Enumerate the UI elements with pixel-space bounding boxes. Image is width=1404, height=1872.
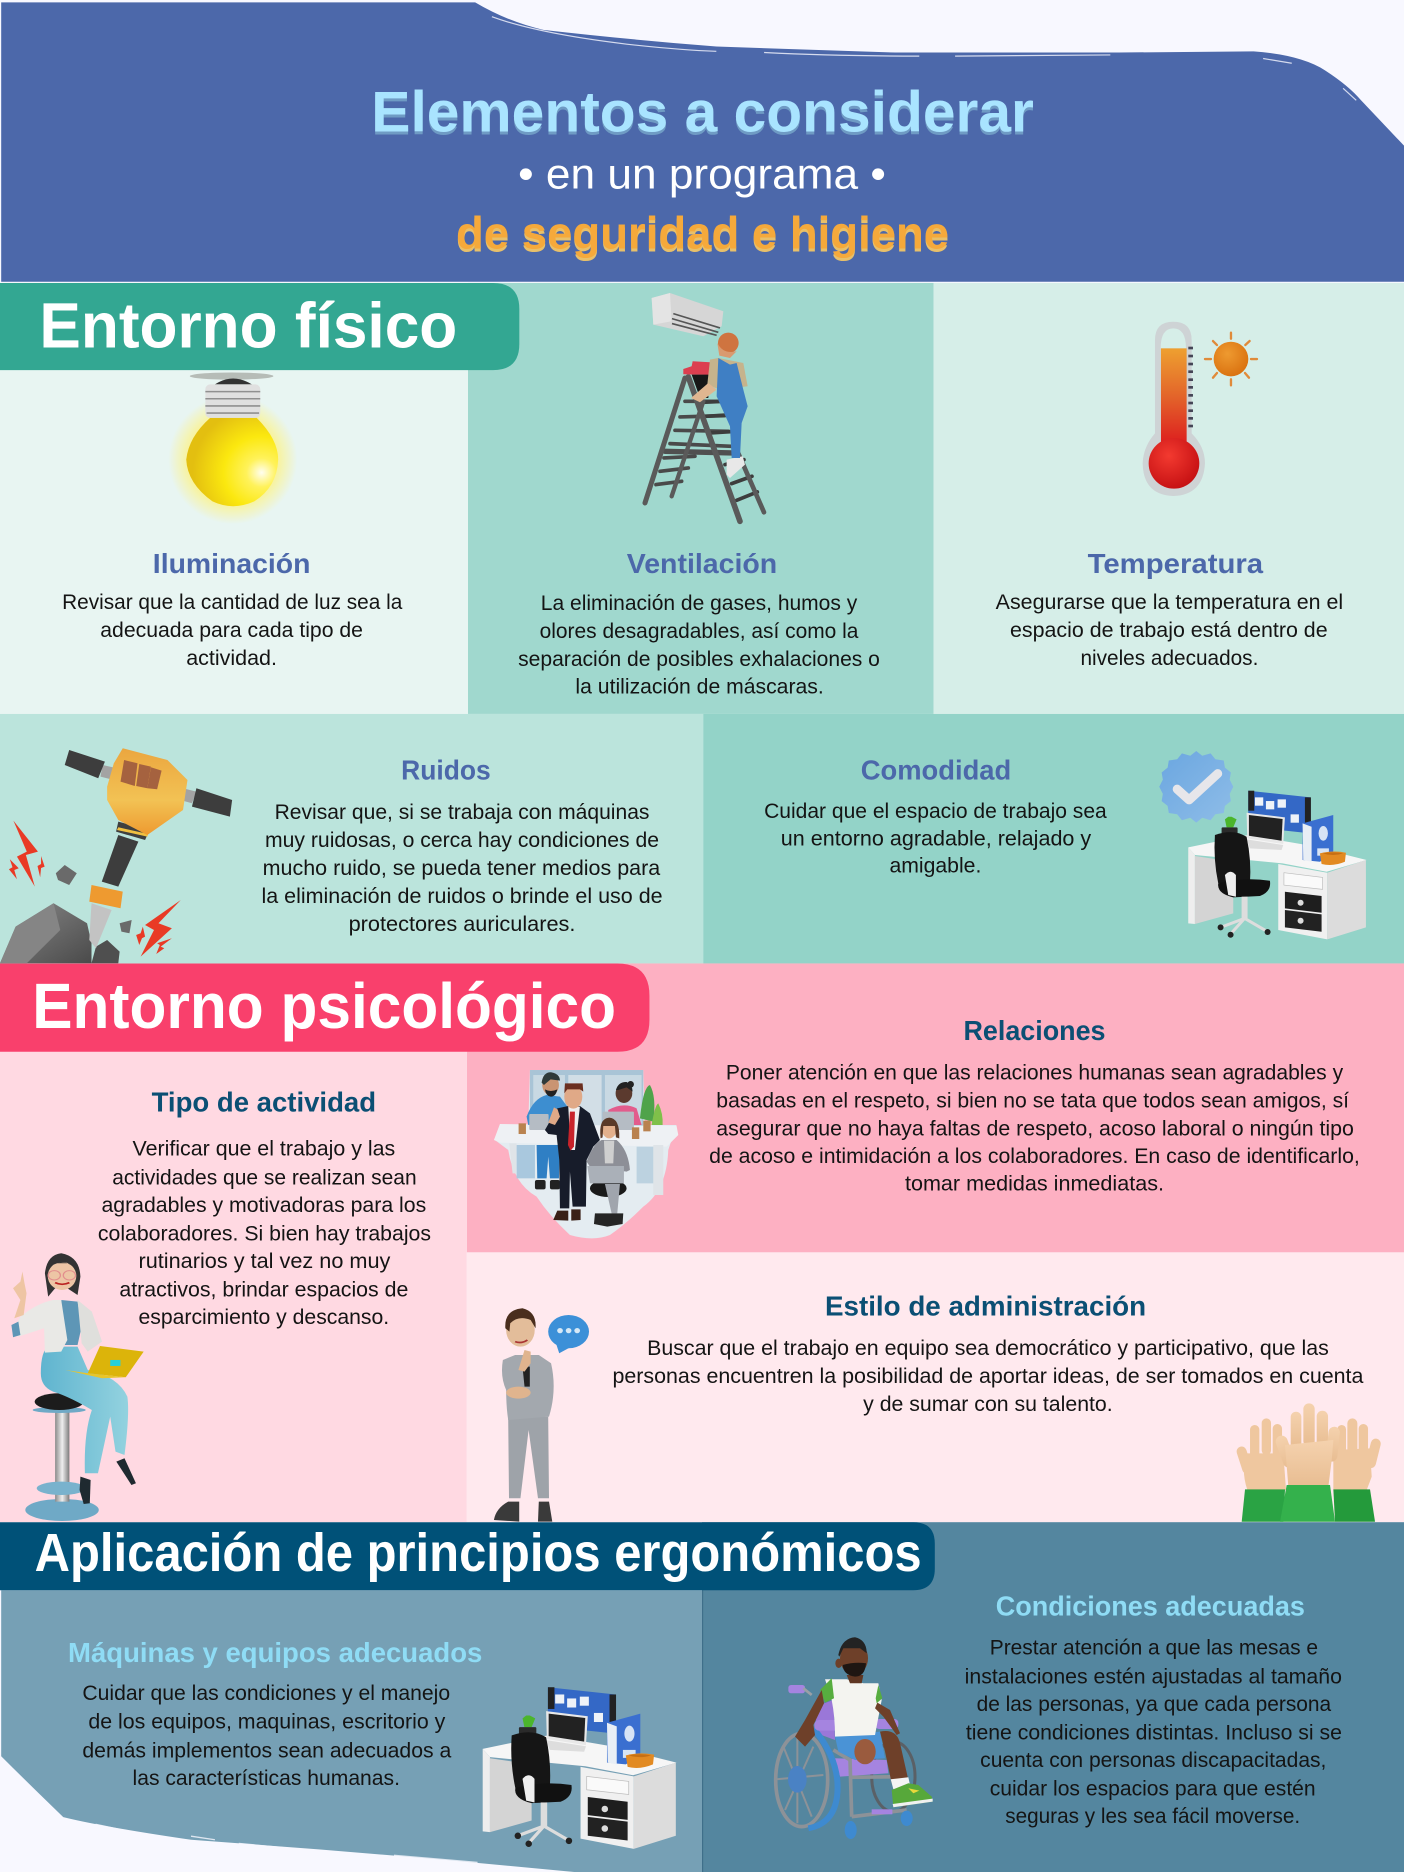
text: Tipo de actividad: actividades que se realizan sean — [112, 1166, 417, 1189]
heading bar: Entorno psicológico: Entorno psicológico — [32, 970, 616, 1042]
text: Condiciones adecuadas: cuenta con personas discapacitadas, — [980, 1749, 1326, 1772]
panel: header — [1, 2, 1404, 282]
panel: Relaciones — [467, 963, 1404, 1252]
text: Tipo de actividad — [98, 1138, 431, 1329]
icon: man in wheelchair — [776, 1637, 933, 1839]
text: Tipo de actividad: colaboradores. Si bien hay trabajos — [98, 1222, 431, 1245]
panel: Ventilación — [468, 283, 934, 714]
heading bar: Entorno físico: Entorno físico — [39, 289, 457, 361]
text: Ruidos: Revisar que, si se trabaja con máquinas — [275, 801, 649, 824]
icon: thinking man with speech bubble — [494, 1308, 589, 1522]
heading: Máquinas y equipos adecuados: Máquinas y equipos adecuados — [68, 1637, 482, 1668]
text: Comodidad: un entorno agradable, relajado y — [781, 827, 1092, 850]
text: Ventilación: olores desagradables, así como la — [540, 620, 859, 643]
text: Condiciones adecuadas — [965, 1637, 1342, 1828]
text: Tipo de actividad: Verificar que el trabajo y las — [133, 1138, 395, 1161]
panel: Ruidos — [0, 714, 703, 963]
text: Máquinas y equipos adecuados: las características humanas. — [133, 1767, 400, 1790]
text: Ruidos: muy ruidosas, o cerca hay condiciones de — [265, 829, 659, 852]
text: Comodidad: Cuidar que el espacio de trabajo sea — [764, 800, 1107, 823]
heading: Temperatura: Temperatura — [1088, 548, 1264, 579]
panel: Comodidad — [703, 714, 1404, 963]
icon: worker on ladder with air conditioner — [645, 293, 764, 521]
panel: Máquinas y equipos adecuados — [1, 1590, 702, 1872]
panel: Tipo de actividad — [0, 1051, 467, 1522]
panel: Iluminación — [0, 283, 468, 714]
heading: Comodidad: Comodidad — [861, 755, 1011, 786]
text: Ruidos: protectores auriculares. — [349, 913, 575, 936]
heading bar: Aplicación de principios ergonómicos: Aplicación de principios ergonómicos — [35, 1523, 922, 1583]
text: Relaciones: basadas en el respeto, si bien no se tata que todos sean amigos, sí — [716, 1089, 1349, 1112]
title: • en un programa • — [518, 151, 886, 199]
heading: Condiciones adecuadas: Condiciones adecuadas — [996, 1590, 1305, 1621]
icon: raised hands — [1235, 1403, 1382, 1522]
text: Iluminación — [62, 591, 403, 670]
heading bar: Entorno físico — [0, 283, 519, 370]
heading: Estilo de administración: Estilo de administración — [825, 1291, 1146, 1322]
title: Elementos a considerar — [371, 80, 1034, 144]
icon: office desk with chair — [483, 1687, 677, 1849]
text: Máquinas y equipos adecuados — [82, 1682, 452, 1790]
text: Iluminación: actividad. — [186, 647, 277, 670]
icon: jackhammer with rocks and sparks — [0, 748, 232, 963]
text: Tipo de actividad: agradables y motivadoras para los — [101, 1194, 426, 1217]
panel: Estilo de administración — [467, 1252, 1404, 1522]
text: Estilo de administración: Buscar que el trabajo en equipo sea democrático y participativo, que las — [647, 1337, 1329, 1360]
text: Ruidos: mucho ruido, se pueda tener medios para — [263, 857, 661, 880]
text: Ventilación: separación de posibles exhalaciones o — [518, 648, 880, 671]
text: Condiciones adecuadas: Prestar atención a que las mesas e — [990, 1637, 1318, 1660]
text: Ventilación — [518, 592, 880, 699]
icon: woman on stool with laptop — [11, 1253, 144, 1521]
text: Condiciones adecuadas: cuidar los espacios para que estén — [990, 1778, 1316, 1801]
text: Estilo de administración: y de sumar con su talento. — [863, 1393, 1113, 1416]
text: Condiciones adecuadas: seguras y les sea fácil moverse. — [1005, 1805, 1300, 1828]
text: Tipo de actividad: rutinarios y tal vez no muy — [138, 1250, 391, 1273]
text: Máquinas y equipos adecuados: Cuidar que las condiciones y el manejo — [82, 1682, 450, 1705]
icon: thermometer and sun — [1143, 322, 1257, 496]
text: Comodidad — [764, 800, 1107, 878]
panel: Condiciones adecuadas — [702, 1522, 1404, 1872]
text: Estilo de administración: personas encuentren la posibilidad de aportar ideas, de ser tomados en cuenta — [612, 1365, 1364, 1388]
heading: Tipo de actividad: Tipo de actividad — [152, 1086, 376, 1117]
heading: Ventilación: Ventilación — [627, 548, 777, 579]
text: Temperatura: niveles adecuados. — [1080, 647, 1258, 670]
text: Temperatura: Asegurarse que la temperatura en el — [996, 591, 1343, 614]
heading: Ruidos: Ruidos — [401, 755, 491, 786]
text: Comodidad: amigable. — [889, 855, 981, 878]
icon: office team — [494, 1070, 678, 1238]
text: Relaciones: asegurar que no haya faltas de respeto, acoso laboral o ningún tipo — [716, 1117, 1354, 1140]
text: Temperatura: espacio de trabajo está dentro de — [1010, 619, 1328, 642]
text: Ruidos — [261, 801, 663, 936]
text: Ruidos: la eliminación de ruidos o brinde el uso de — [261, 885, 663, 908]
icon: light bulb — [168, 372, 297, 524]
title: Elementos a considerar — [371, 83, 1034, 147]
title: de seguridad e higiene — [456, 210, 949, 261]
title: de seguridad e higiene — [456, 207, 949, 258]
icon: office desk with chair — [1188, 791, 1367, 939]
heading: Iluminación: Iluminación — [153, 548, 310, 579]
text: Condiciones adecuadas: de las personas, ya que cada persona — [977, 1693, 1331, 1716]
title — [371, 80, 1034, 261]
text: Condiciones adecuadas: tiene condiciones distintas. Incluso si se — [966, 1721, 1342, 1744]
text: Relaciones: de acoso e intimidación a los colaboradores. En caso de identificarlo, — [709, 1145, 1360, 1168]
panel: Temperatura — [934, 283, 1404, 714]
text: Tipo de actividad: esparcimiento y descanso. — [138, 1306, 389, 1329]
text: Ventilación: la utilización de máscaras. — [575, 676, 824, 699]
text: Condiciones adecuadas: instalaciones estén ajustadas al tamaño — [965, 1665, 1342, 1688]
text: Máquinas y equipos adecuados: de los equipos, maquinas, escritorio y — [88, 1711, 446, 1734]
heading: Relaciones: Relaciones — [963, 1015, 1106, 1046]
icon: verified badge — [1159, 751, 1233, 823]
text: Máquinas y equipos adecuados: demás implementos sean adecuados a — [82, 1739, 452, 1762]
text: Ventilación: La eliminación de gases, humos y — [541, 592, 858, 615]
text: Estilo de administración — [612, 1337, 1364, 1416]
text: Relaciones — [709, 1061, 1360, 1195]
text: Iluminación: Revisar que la cantidad de luz sea la — [62, 591, 403, 614]
text: Relaciones: tomar medidas inmediatas. — [905, 1172, 1164, 1195]
text: Temperatura — [996, 591, 1343, 670]
text: Relaciones: Poner atención en que las relaciones humanas sean agradables y — [726, 1061, 1344, 1084]
text: Iluminación: adecuada para cada tipo de — [100, 619, 363, 642]
text: Tipo de actividad: atractivos, brindar espacios de — [119, 1279, 408, 1302]
